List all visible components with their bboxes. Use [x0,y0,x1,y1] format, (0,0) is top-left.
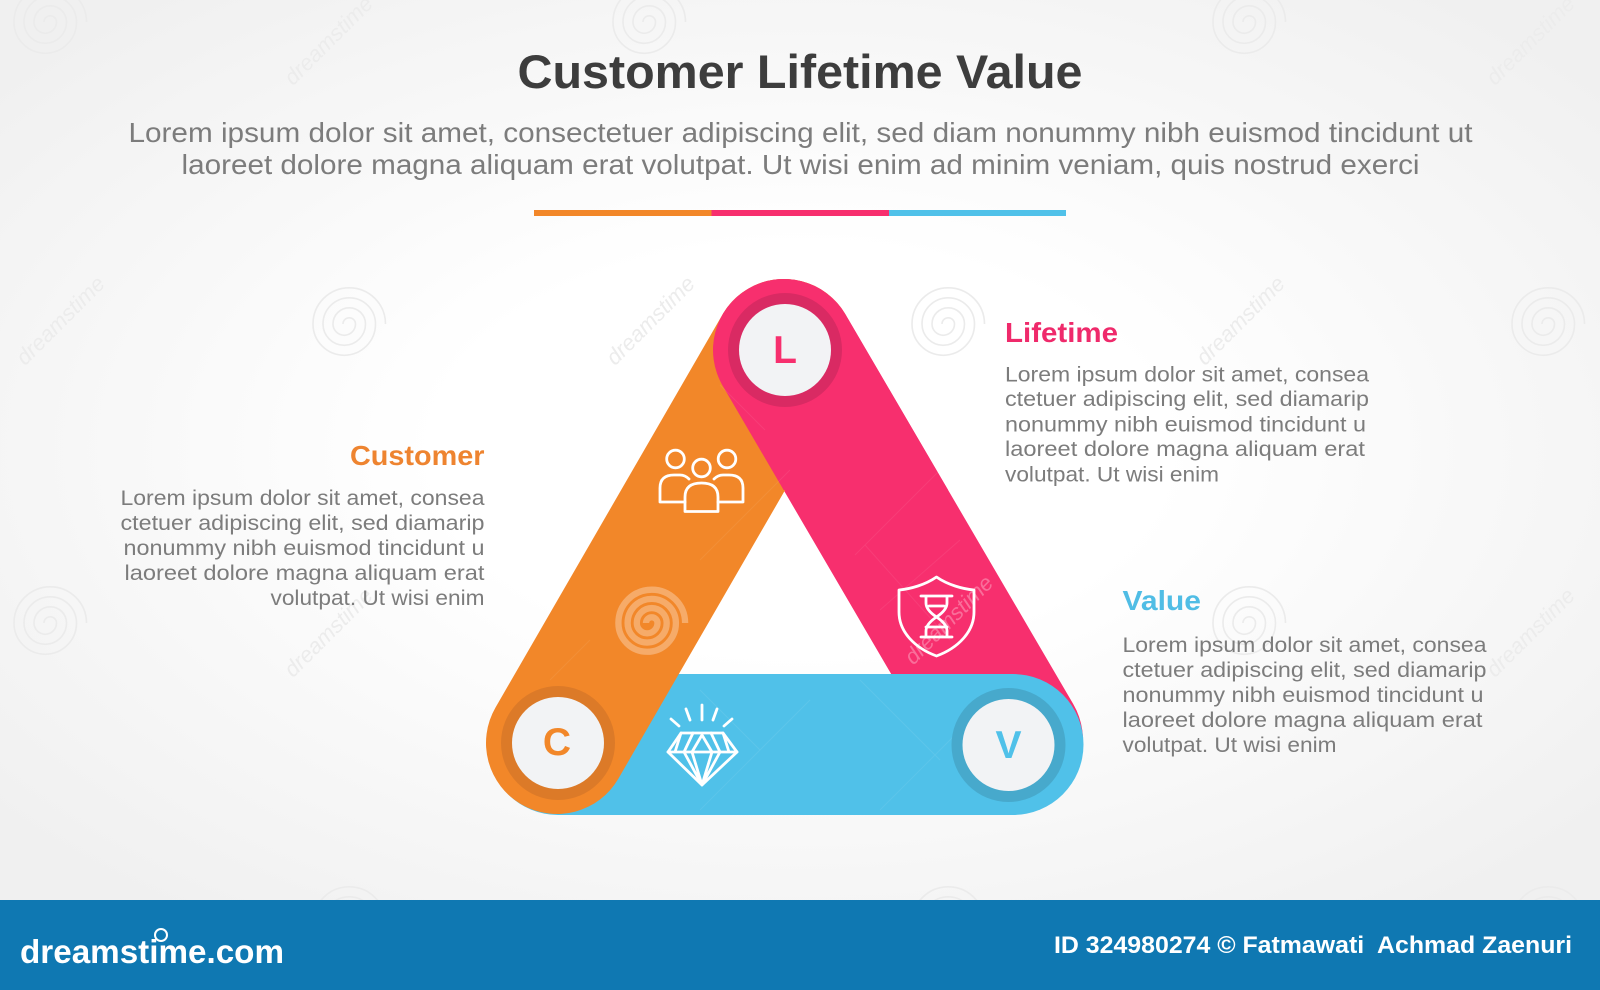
text: Customer description: laoreet dolore magna aliquam erat [124,562,485,585]
watermark text on pink band: dreamstime [899,570,998,669]
text: Value description [1122,634,1487,757]
text: Customer description: nonummy nibh euismod tincidunt u [124,537,485,560]
label: Lifetime: Lifetime [1005,317,1118,348]
text: Lifetime description: Lorem ipsum dolor sit amet, consea [1005,364,1369,386]
subtitle: Lorem ipsum dolor sit amet, consectetuer adipiscing elit, sed diam nonummy nibh euismod tincidunt ut [128,117,1473,148]
text: Value description: volutpat. Ut wisi enim [1122,734,1336,757]
watermark text: dreamstime [601,271,700,370]
band: value [558,674,1013,815]
footer logo: dreamstime.com [20,933,284,970]
band: customer [557,350,784,743]
band: lifetime, lower part [784,350,1012,740]
spiral watermark on orange band [618,590,685,652]
title: Customer Lifetime Value [518,45,1082,98]
label: Lifetime [1005,317,1369,486]
text: Lifetime description: nonummy nibh euismod tincidunt u [1005,414,1366,436]
subtitle [128,117,1473,180]
text: Customer description: ctetuer adipiscing elit, sed diamarip [120,512,484,535]
subtitle: laoreet dolore magna aliquam erat volutpat. Ut wisi enim ad minim veniam, quis nostrud exerci [182,149,1420,180]
text: Value description: laoreet dolore magna aliquam erat [1122,709,1483,732]
label: Customer: Customer [350,440,485,471]
icon: people [660,450,743,512]
watermark text: dreamstime [279,583,378,682]
label: Value: Value [1122,585,1201,616]
footer credit: ID 324980274 © Fatmawati Achmad Zaenuri [1054,932,1572,959]
text: Value description: ctetuer adipiscing elit, sed diamarip [1122,659,1486,682]
icon: diamond [668,705,737,785]
triangle diagram [501,293,1066,810]
text: Value description: Lorem ipsum dolor sit amet, consea [1122,634,1487,657]
watermark text: dreamstime [1481,583,1580,682]
text: Lifetime description: volutpat. Ut wisi enim [1005,464,1219,486]
band texture lines [550,385,1000,810]
text: Value description: nonummy nibh euismod tincidunt u [1122,684,1484,707]
watermark text: dreamstime [11,271,110,370]
text: Customer description: volutpat. Ut wisi enim [270,587,484,610]
footer bar [0,900,1600,990]
node L [728,293,842,407]
icon: shield with hourglass [899,577,974,656]
watermark text [11,0,1580,682]
text: Lifetime description: ctetuer adipiscing elit, sed diamarip [1005,388,1369,411]
watermark text: dreamstime [1191,271,1290,370]
node V [952,688,1066,802]
label: Customer [120,440,485,610]
text: Lifetime description: laoreet dolore magna aliquam erat [1005,438,1365,461]
label: Value [1122,585,1487,757]
node V: V [995,724,1022,767]
node C [501,686,615,800]
tri-colour divider [534,210,1066,216]
band: lifetime, upper overlap [713,279,948,490]
text: Customer description [120,487,485,610]
footer logo spiral [155,929,167,941]
node C: C [543,721,571,764]
node L: L [773,329,797,372]
text: Customer description: Lorem ipsum dolor sit amet, consea [120,487,485,510]
text: Lifetime description [1005,364,1369,486]
